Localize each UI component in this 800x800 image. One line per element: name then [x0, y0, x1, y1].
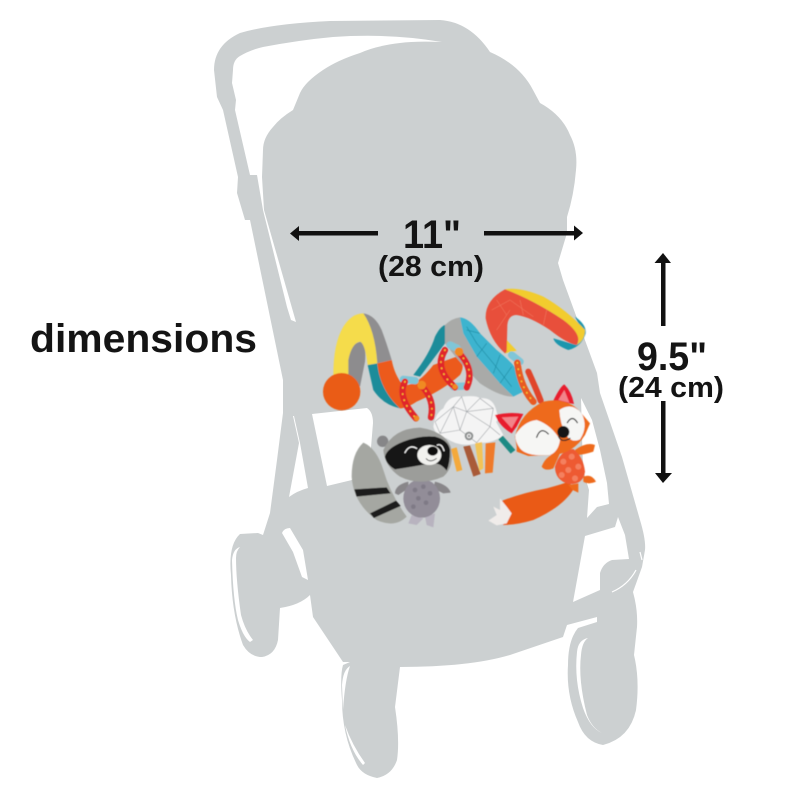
toy: activity spiral — [323, 289, 596, 527]
height measurement — [618, 253, 724, 483]
label: 28 cm: (28 cm) — [378, 251, 484, 283]
arrow: width left — [290, 226, 378, 241]
toy: ribbon tags — [451, 436, 515, 477]
stroller silhouette — [214, 20, 645, 778]
toy: cloud — [433, 396, 503, 445]
fox body — [542, 444, 596, 493]
spiral: arches — [323, 289, 586, 410]
fox tail — [488, 482, 574, 525]
label: 24 cm: (24 cm) — [618, 372, 724, 404]
width measurement — [290, 213, 583, 283]
raccoon body — [395, 479, 451, 527]
spiral: beads — [414, 347, 463, 421]
toy: fox — [488, 384, 596, 525]
toy: raccoon — [352, 428, 452, 527]
title: dimensions: dimensions — [30, 317, 257, 361]
raccoon tail — [352, 443, 407, 523]
arrow: height up — [654, 253, 671, 326]
raccoon head — [377, 428, 452, 482]
arrow: height down — [655, 401, 672, 483]
spiral: linking rings — [402, 345, 541, 418]
label: 9.5 inches: 9.5" — [637, 335, 707, 379]
fox head — [495, 384, 590, 456]
arrow: width right — [484, 226, 583, 240]
label: 11 inches: 11" — [403, 213, 461, 257]
